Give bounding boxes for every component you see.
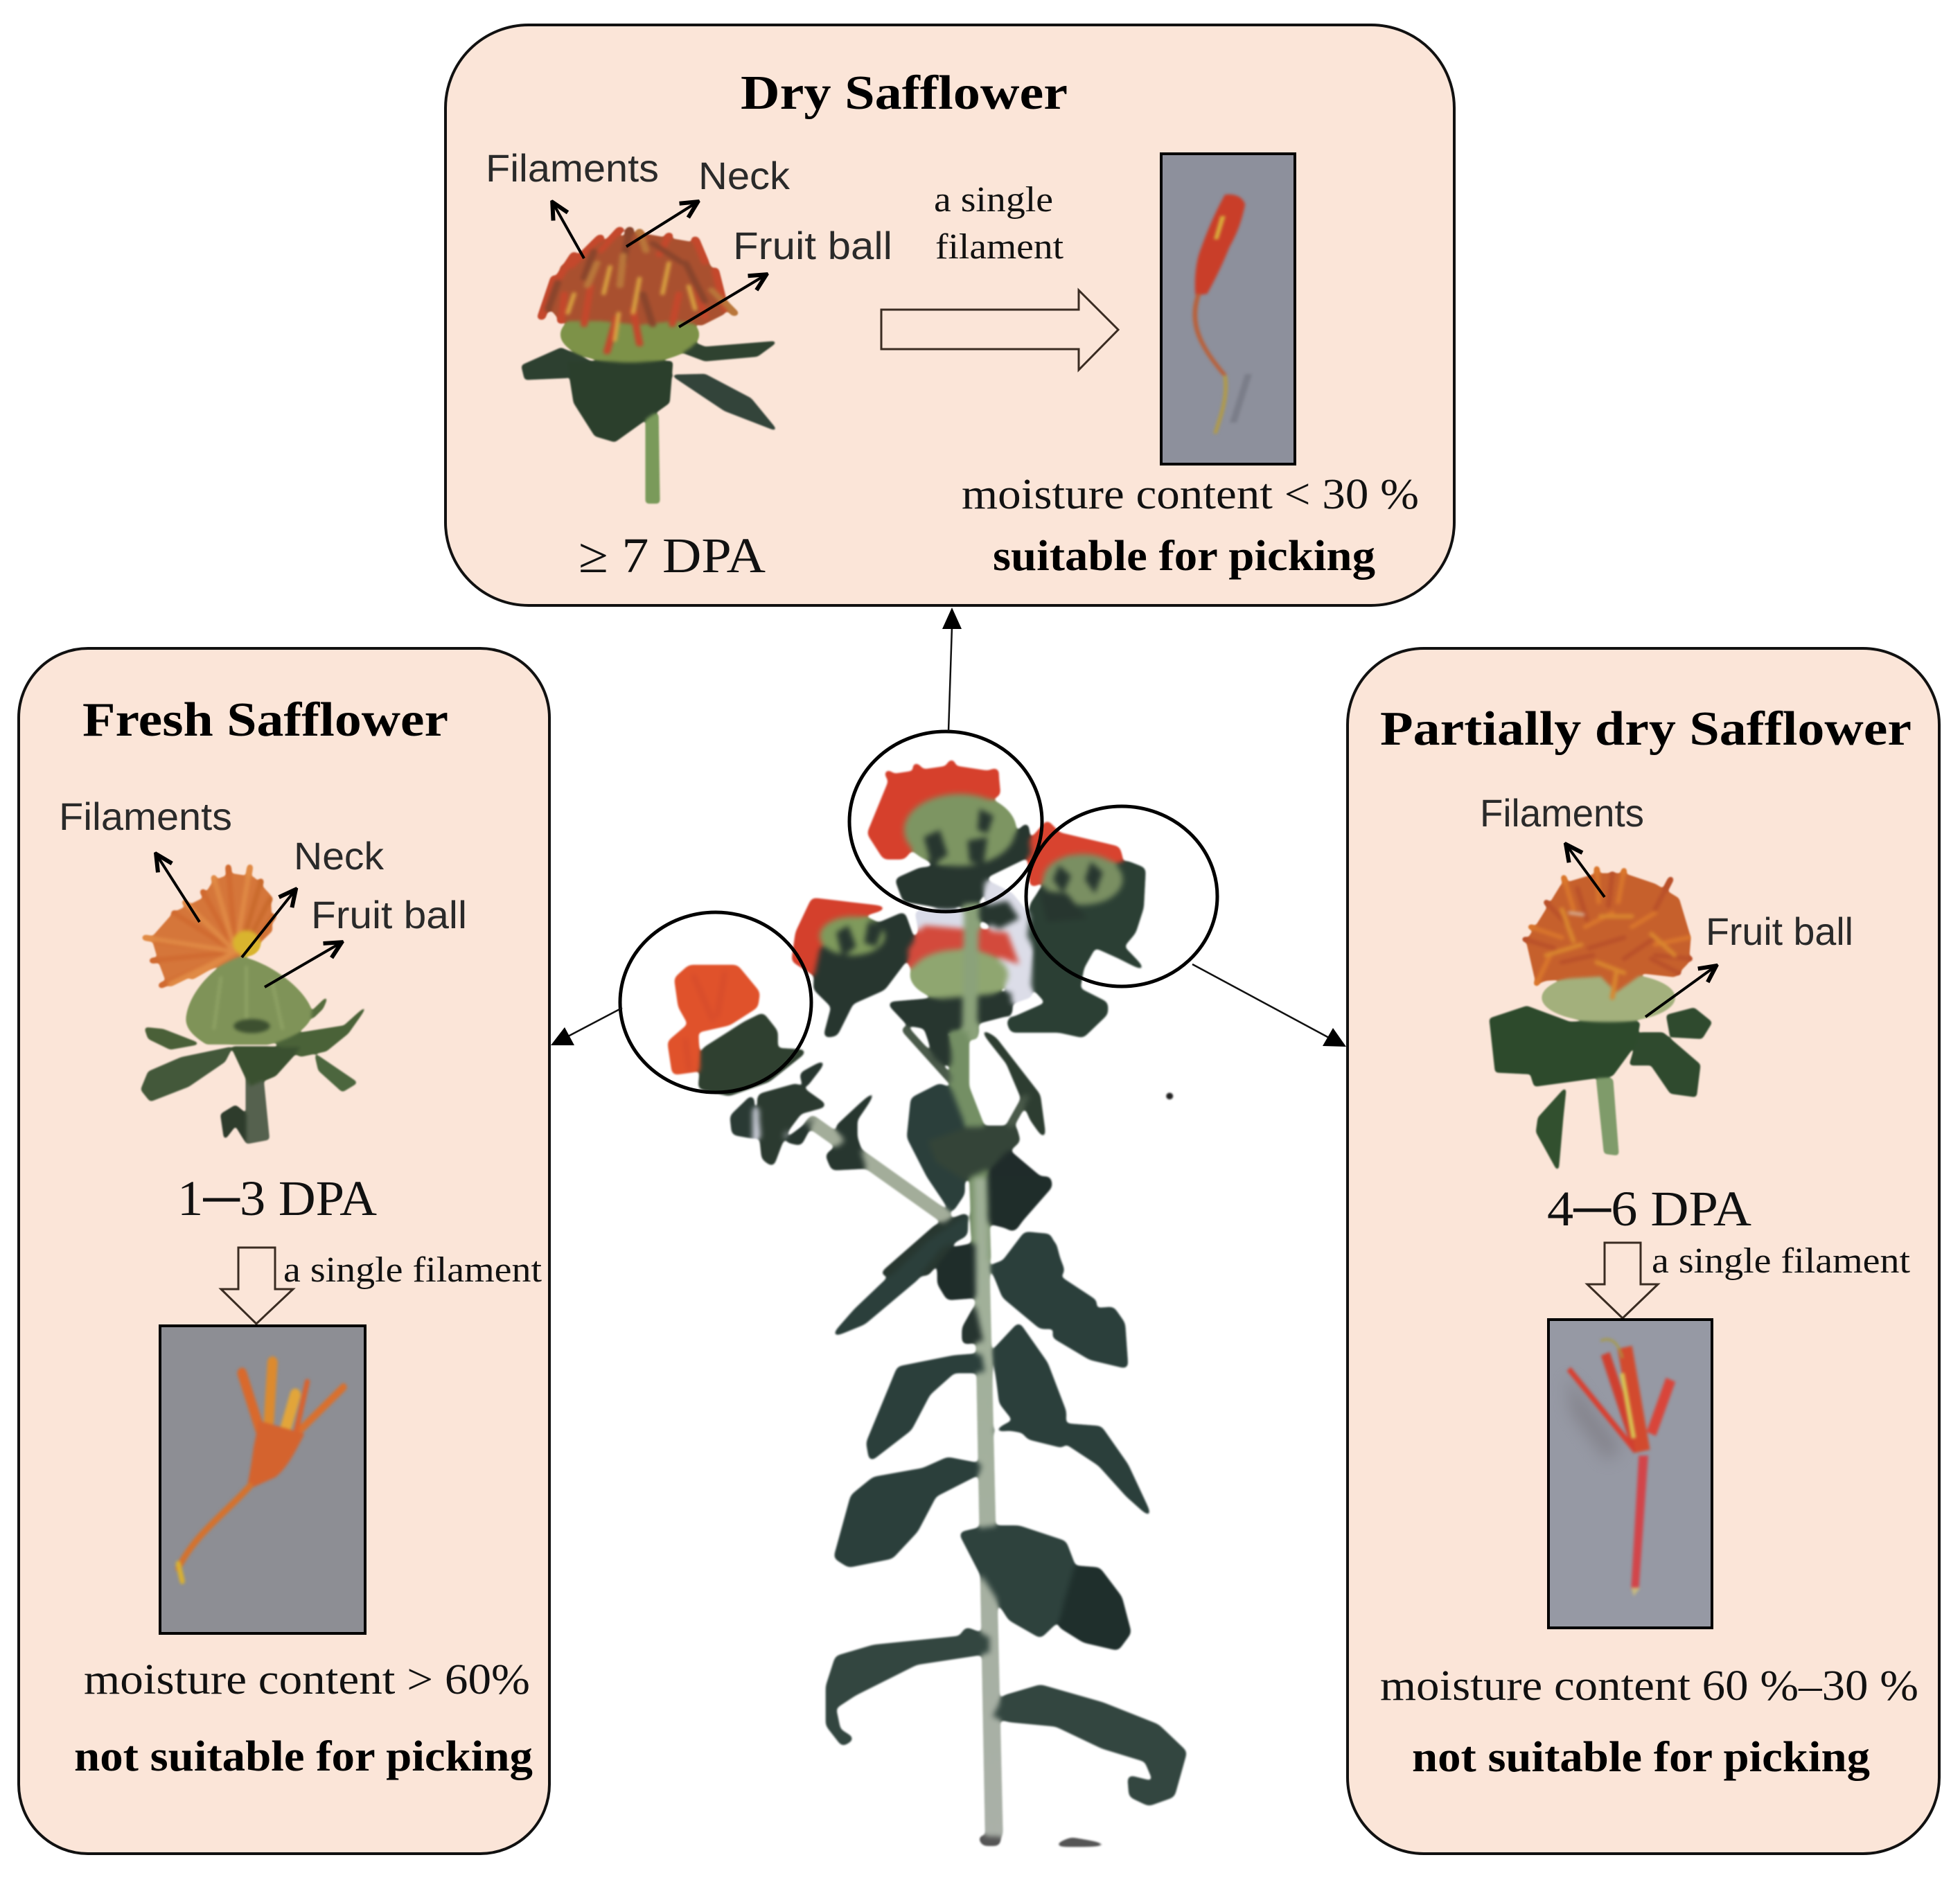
arrow: plant to dry panel bbox=[942, 608, 962, 731]
label: fruit ball: Fruit ball bbox=[733, 224, 892, 267]
photo: partially dry flower head bbox=[1490, 869, 1711, 1171]
label: fruit ball: Fruit ball bbox=[311, 893, 467, 937]
heading: partially dry safflower: Partially dry Safflower bbox=[1380, 702, 1912, 756]
circle: dry stage flower bbox=[849, 731, 1042, 912]
panel: dry safflower bbox=[445, 25, 1454, 605]
text: moisture content: moisture content > 60% bbox=[84, 1656, 530, 1703]
arrow: plant to partially dry panel bbox=[1192, 964, 1346, 1047]
label: filaments: Filaments bbox=[1480, 791, 1644, 835]
plant: upper branches and flower heads bbox=[669, 763, 1173, 1275]
arrow: plant to fresh panel bbox=[551, 1008, 622, 1045]
photo: dry flower head bbox=[522, 229, 777, 503]
panel: partially dry safflower bbox=[1348, 648, 1939, 1854]
photo: dry single filament bbox=[1161, 154, 1295, 464]
text: a single filament: a single filament bbox=[1652, 1241, 1911, 1281]
label: neck: Neck bbox=[294, 834, 385, 878]
photo: partially dry single filament bbox=[1548, 1320, 1712, 1628]
arrow: to fruit ball bbox=[265, 943, 341, 987]
label: neck: Neck bbox=[698, 154, 791, 197]
hollow arrow: to single filament bbox=[881, 290, 1118, 370]
arrow: to fruit ball bbox=[1645, 966, 1715, 1017]
plant: main stem and lower leaves bbox=[827, 1178, 1186, 1845]
heading: fresh safflower: Fresh Safflower bbox=[82, 693, 448, 747]
arrow: to filaments bbox=[157, 855, 200, 922]
label: fruit ball: Fruit ball bbox=[1706, 910, 1853, 953]
text: suitability: suitable for picking bbox=[993, 533, 1375, 580]
photo: safflower plant bbox=[669, 763, 1186, 1845]
arrow: to neck bbox=[242, 890, 295, 957]
hollow arrow: to single filament bbox=[221, 1248, 293, 1324]
text: a single filament bbox=[934, 180, 1064, 267]
panel: fresh safflower bbox=[19, 648, 549, 1854]
text: a single filament: a single bbox=[934, 180, 1053, 220]
text: days post anthesis: ≥ 7 DPA bbox=[579, 528, 766, 583]
text: days post anthesis: 1─3 DPA bbox=[177, 1171, 377, 1226]
text: suitability: not suitable for picking bbox=[74, 1733, 533, 1780]
heading: dry safflower: Dry Safflower bbox=[741, 66, 1068, 120]
text: suitability: not suitable for picking bbox=[1412, 1734, 1870, 1781]
photo: fresh single filament bbox=[160, 1326, 365, 1633]
text: a single filament: filament bbox=[935, 227, 1064, 267]
text: days post anthesis: 4─6 DPA bbox=[1547, 1181, 1751, 1236]
text: moisture content: moisture content 60 %–30 % bbox=[1380, 1662, 1918, 1710]
text: moisture content: moisture content < 30 % bbox=[962, 471, 1419, 518]
photo: fresh flower head bbox=[141, 867, 368, 1144]
arrow: to fruit ball bbox=[679, 275, 766, 327]
label: filaments: Filaments bbox=[486, 146, 659, 190]
arrow: to neck bbox=[626, 202, 697, 247]
circle: fresh stage flower bbox=[620, 912, 811, 1092]
text: a single filament: a single filament bbox=[283, 1250, 542, 1290]
arrow: to filaments bbox=[553, 203, 584, 258]
arrow: to filaments bbox=[1566, 845, 1605, 897]
circle: partially dry stage flower bbox=[1026, 806, 1217, 986]
hollow arrow: to single filament bbox=[1587, 1243, 1658, 1318]
label: filaments: Filaments bbox=[59, 795, 232, 838]
